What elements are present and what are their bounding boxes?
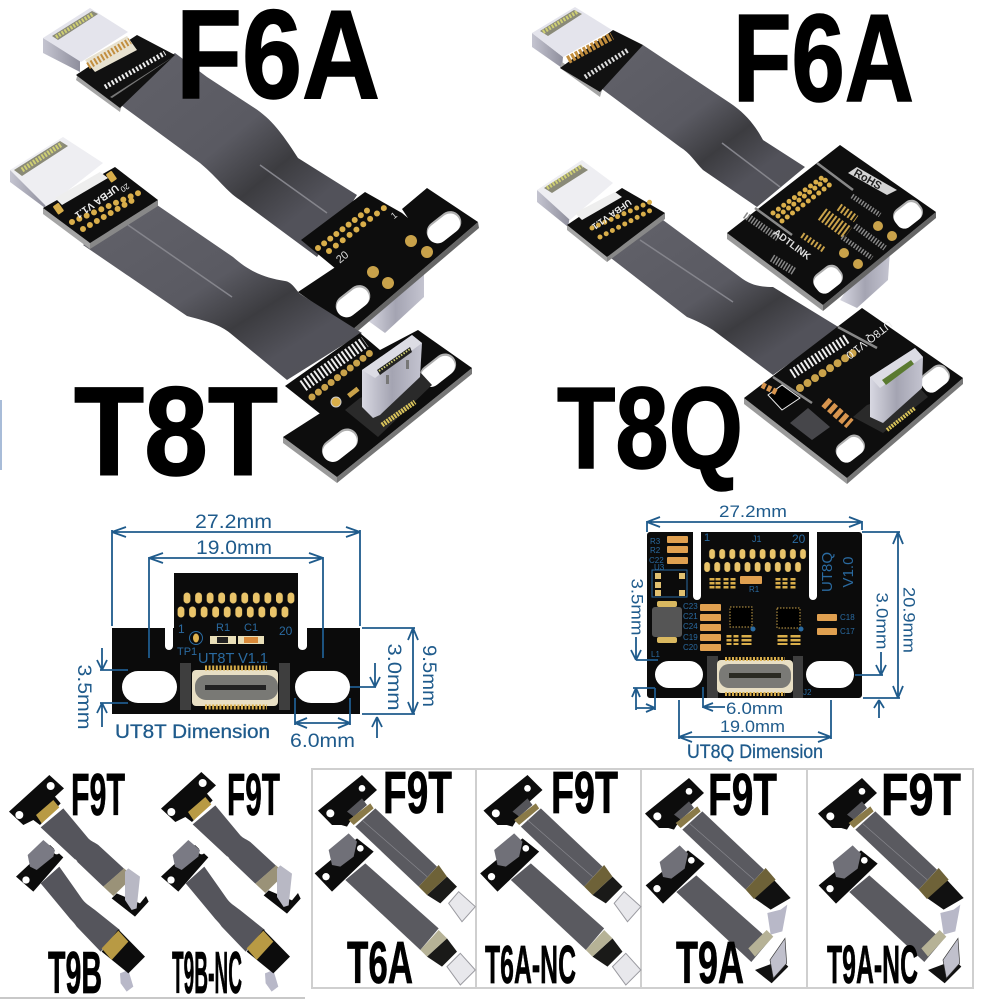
UT8Q board: C19 xyxy=(683,633,698,642)
UT8T board: 1 xyxy=(178,622,185,636)
UT8Q board: 20 xyxy=(792,532,806,546)
upper T board: 1 xyxy=(389,210,399,221)
UT8T dimension labels: 19.0mm xyxy=(196,538,272,559)
title: T8Q: T8Q xyxy=(557,363,743,493)
UT8Q dimension labels: 6.0mm xyxy=(726,699,783,718)
panel: F6A to T8T cable render xyxy=(10,8,479,483)
UT8Q board: C20 xyxy=(683,643,698,652)
panel: F9T to T6A xyxy=(315,760,475,996)
lower cable xyxy=(607,220,840,375)
UT8Q board: C18 xyxy=(840,613,855,622)
UT8Q board: V1.0 xyxy=(840,557,857,587)
UT8T dimension labels: 9.5mm xyxy=(418,645,439,707)
lower connector art xyxy=(921,930,961,983)
lower assembly art xyxy=(819,845,943,962)
upper plug xyxy=(43,8,128,72)
frame: four-panel box xyxy=(312,769,973,988)
label F9T: F9T xyxy=(551,760,618,826)
upper assembly art xyxy=(818,778,964,935)
label F9T: F9T xyxy=(383,760,452,826)
label T9A: T9A xyxy=(676,930,744,996)
UT8Q dimension labels: UT8Q Dimension xyxy=(687,742,823,763)
UT8Q board: C21 xyxy=(683,612,698,621)
dimension drawing: UT8Q xyxy=(628,502,919,763)
upper left PCB xyxy=(560,30,643,97)
upper cable F6A xyxy=(110,53,357,257)
label F9T: F9T xyxy=(708,762,777,828)
panel: F9T to T9B xyxy=(9,762,149,1001)
lower plug xyxy=(537,160,613,227)
UT8Q board: 1 xyxy=(704,532,710,544)
lower cable T8T xyxy=(83,205,362,380)
UT8Q dimension lines xyxy=(631,517,903,742)
panel: F9T to T9B-NC xyxy=(161,762,301,1001)
upper plug xyxy=(532,7,612,68)
F9T upper assembly xyxy=(161,772,301,914)
UT8Q dimension labels: 19.0mm xyxy=(720,717,785,736)
UT8T dimension labels: 3.5mm xyxy=(73,664,94,730)
UT8T board: UT8T V1.1 xyxy=(198,650,268,667)
assembly art xyxy=(315,775,475,985)
lower connector art xyxy=(748,930,788,983)
lower left PCB xyxy=(567,188,665,262)
panel: F9T to T9A-NC xyxy=(818,762,964,995)
bottom rule xyxy=(0,997,305,999)
UT8T dimension labels: UT8T Dimension xyxy=(115,722,270,743)
UT8Q dimension labels xyxy=(628,502,919,763)
lower T8T board with USB-C xyxy=(283,330,472,483)
assembly art xyxy=(480,775,641,985)
label T6A: T6A xyxy=(347,930,413,996)
lower cable stripe xyxy=(128,225,232,297)
label F9T: F9T xyxy=(71,762,125,828)
T9B lower assembly xyxy=(16,840,145,992)
edge mark xyxy=(0,400,2,470)
panel: F9T to T9A xyxy=(645,762,791,996)
panel: F6A to T8Q cable render xyxy=(532,7,963,484)
title: T8T: T8T xyxy=(74,361,278,502)
lower T8Q board with USB-C xyxy=(744,308,963,484)
F9T upper assembly xyxy=(9,775,149,917)
UT8Q board: C22 xyxy=(649,556,664,565)
UT8Q dimension labels: 27.2mm xyxy=(719,502,787,521)
UT8Q dimension labels: 20.9mm xyxy=(900,587,919,653)
panel: F9T to T6A-NC: T6A-NC xyxy=(485,935,576,995)
UT8Q board: R3 xyxy=(650,537,661,546)
UT8T dimension labels: 27.2mm xyxy=(195,512,272,533)
UT8T dimension labels: 6.0mm xyxy=(290,731,355,752)
lower left PCB: UFBA V1.1 xyxy=(590,197,633,232)
upper T board xyxy=(298,188,479,336)
UT8Q board: R2 xyxy=(650,546,661,555)
upper assembly art xyxy=(645,778,791,935)
UT8T dimension labels xyxy=(73,512,439,752)
UT8T board: TP1 xyxy=(177,646,197,658)
lower left PCB UFBA xyxy=(43,167,158,249)
T9B-NC lower assembly xyxy=(161,840,290,992)
label F9T: F9T xyxy=(227,762,280,828)
UT8T dimension labels: 3.0mm xyxy=(383,644,404,710)
upper square board with RoHS: RoHS xyxy=(852,167,883,193)
UT8Q board: J2 xyxy=(803,688,812,697)
UT8Q board: L1 xyxy=(651,650,660,659)
lower T8Q board with USB-C: UT8Q V1.0 xyxy=(843,318,894,361)
UT8Q board: C23 xyxy=(683,602,698,611)
UT8T board xyxy=(112,573,360,714)
UT8Q board: C17 xyxy=(840,627,855,636)
lower assembly art xyxy=(646,845,770,962)
lower left PCB UFBA: UFBA V1.1 xyxy=(72,182,120,220)
UT8T board: C1 xyxy=(244,622,258,634)
UT8Q board: C24 xyxy=(683,622,698,631)
lower plug xyxy=(10,137,103,208)
UT8Q dimension labels: 3.0mm xyxy=(873,592,892,650)
UT8Q board: U3 xyxy=(654,563,665,572)
UT8Q dimension labels: 3.5mm xyxy=(628,578,647,636)
UT8T board: R1 xyxy=(216,622,230,634)
panel: F9T to T6A-NC xyxy=(480,760,641,995)
upper stripe xyxy=(722,143,780,187)
UT8Q board: J1 xyxy=(752,534,762,544)
lower stripe xyxy=(640,240,733,302)
UT8T dimension lines xyxy=(97,527,418,738)
upper square board with RoHS xyxy=(727,145,936,311)
UT8Q board xyxy=(647,532,862,698)
upper square board with RoHS: ADTLINK xyxy=(771,227,813,263)
upper left PCB xyxy=(76,35,176,112)
upper T board: 20 xyxy=(334,249,351,266)
label F9T: F9T xyxy=(881,762,961,828)
UT8Q board: UT8Q xyxy=(819,552,836,592)
UT8Q board: R1 xyxy=(749,585,760,594)
UT8T board: 20 xyxy=(279,624,293,638)
upper cable xyxy=(590,45,805,207)
dimension drawing: UT8T xyxy=(73,512,439,752)
lower left PCB UFBA: 20 xyxy=(118,181,131,194)
upper cable stripe xyxy=(260,165,327,213)
